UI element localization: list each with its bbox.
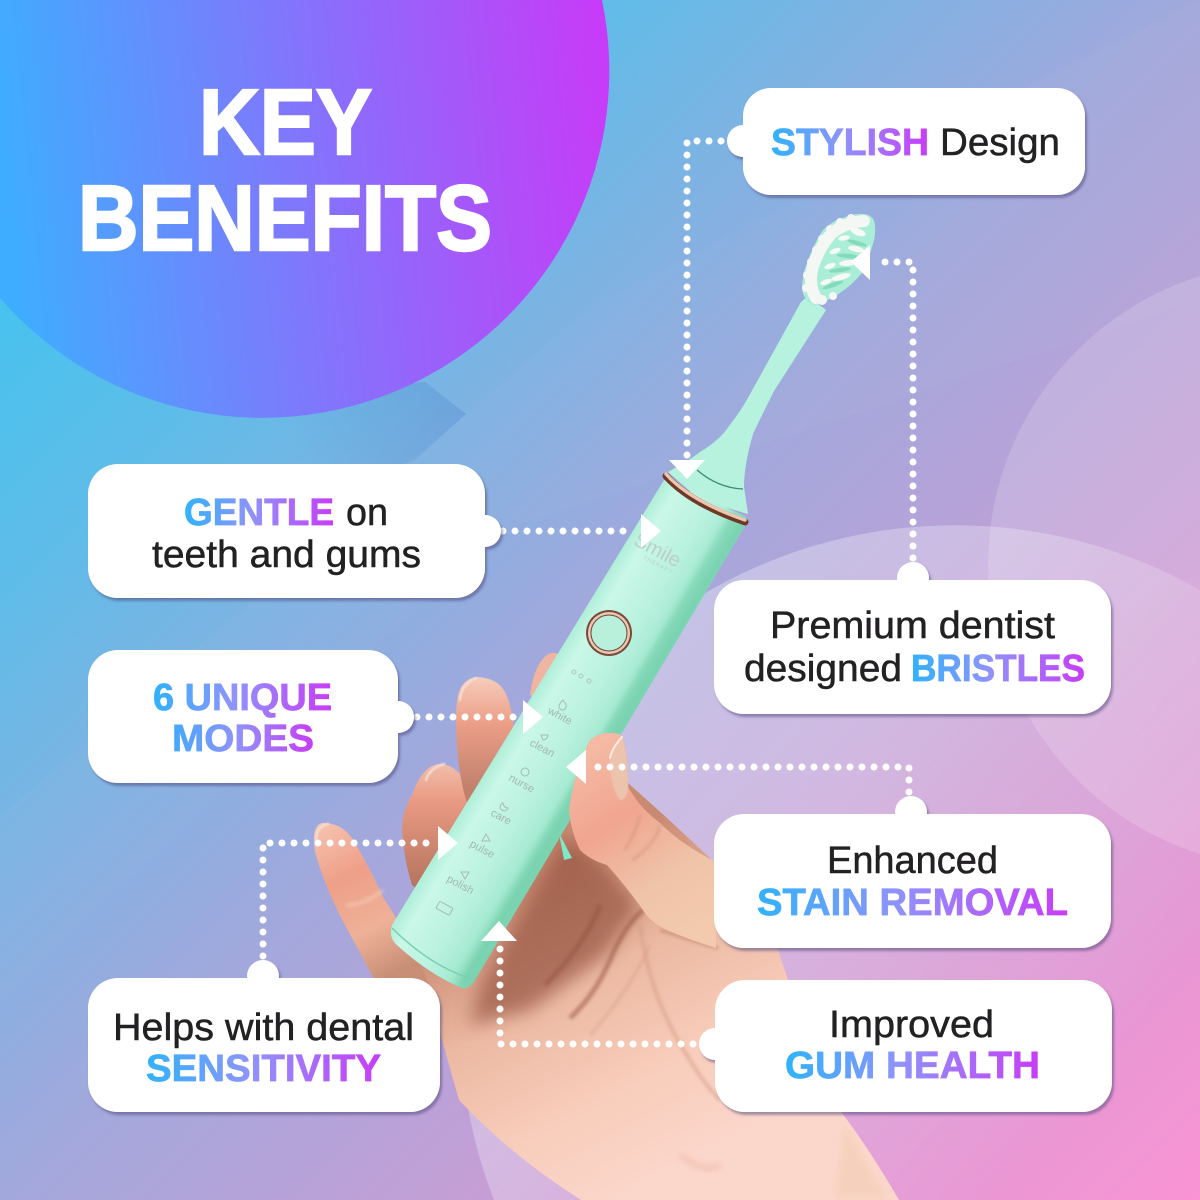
arrow right <box>523 700 543 734</box>
thumb <box>569 733 716 948</box>
knuckle creases <box>625 815 660 860</box>
mode labels: polish <box>445 873 476 897</box>
mode labels: nurse <box>507 772 537 796</box>
handle shading <box>392 510 750 992</box>
callout: bristles: BRISTLES <box>911 648 1085 690</box>
callout: gentle <box>88 464 501 598</box>
toothbrush <box>391 214 875 992</box>
callout: gentle: on <box>346 492 388 534</box>
power button <box>586 610 632 656</box>
connector: bristles <box>851 245 913 558</box>
hand holding toothbrush <box>314 653 899 1200</box>
callout: gentle: teeth and gums <box>152 534 421 576</box>
callout: gum health: GUM HEALTH <box>785 1045 1040 1087</box>
heading circle <box>0 0 609 418</box>
connector: gum health <box>481 921 693 1044</box>
arrow down <box>669 460 705 479</box>
brand logo: Smile <box>630 529 685 572</box>
title: BENEFITS <box>78 166 492 270</box>
connector: gentle <box>503 514 661 548</box>
callout: sensitivity <box>88 960 440 1112</box>
callout: gum health: Improved <box>829 1004 994 1046</box>
mode labels: pulse <box>468 838 496 861</box>
connector: stylish design <box>669 141 721 479</box>
arrow right <box>641 514 661 548</box>
callout: bristles: Premium dentist <box>770 605 1055 647</box>
arrow up <box>481 921 517 941</box>
connector: stain removal <box>566 750 909 792</box>
callout: sensitivity: SENSITIVITY <box>146 1048 381 1090</box>
brush head <box>802 214 875 306</box>
connector: sensitivity <box>263 826 458 956</box>
shadow between fingers and handle <box>440 800 490 868</box>
callout: bristles: designed <box>744 648 902 690</box>
callout: sensitivity: Helps with dental <box>113 1007 414 1049</box>
nail edge <box>610 737 622 758</box>
handle body <box>391 480 747 988</box>
palm <box>373 783 899 1200</box>
bristle tufts <box>822 238 867 291</box>
title <box>78 70 492 270</box>
callout: stylish design <box>727 88 1085 195</box>
middle finger <box>402 764 470 900</box>
collar seam <box>697 470 743 489</box>
mode labels: care <box>489 807 513 828</box>
back finger <box>530 653 562 705</box>
title: KEY <box>199 70 372 174</box>
callout: stain removal: Enhanced <box>827 840 998 882</box>
connector: modes <box>417 700 543 734</box>
brand logo: THERAPY <box>642 555 674 576</box>
callout: stain removal: STAIN REMOVAL <box>757 882 1068 924</box>
callout: unique modes: MODES <box>172 718 314 760</box>
bristle fringe <box>811 221 864 298</box>
pinky finger <box>314 823 440 1010</box>
callout: gentle: GENTLE <box>184 492 334 534</box>
callout: gum health <box>699 980 1112 1112</box>
callout: unique modes <box>88 650 414 783</box>
callout: stylish design: Design <box>940 122 1060 164</box>
mode labels: clean <box>528 737 556 760</box>
palm shadow <box>470 835 885 1198</box>
callout: stain removal <box>714 796 1111 948</box>
brush neck and shaft <box>668 296 826 514</box>
callout: stylish design: STYLISH <box>771 122 929 164</box>
arrow left <box>566 750 586 784</box>
thumbnail <box>610 737 628 800</box>
mode labels <box>436 700 574 915</box>
mode labels: white <box>545 705 574 728</box>
fingertip highlights <box>316 678 476 840</box>
indicator dots <box>572 670 591 683</box>
metal collar ring <box>666 476 745 522</box>
callout: unique modes: 6 UNIQUE <box>153 677 332 719</box>
toothbrush mint sliver <box>559 833 572 860</box>
callout: bristles <box>714 562 1111 714</box>
arrow right <box>438 826 458 860</box>
arrow left <box>851 245 870 280</box>
pinky crease <box>346 890 383 905</box>
index finger <box>456 677 514 815</box>
